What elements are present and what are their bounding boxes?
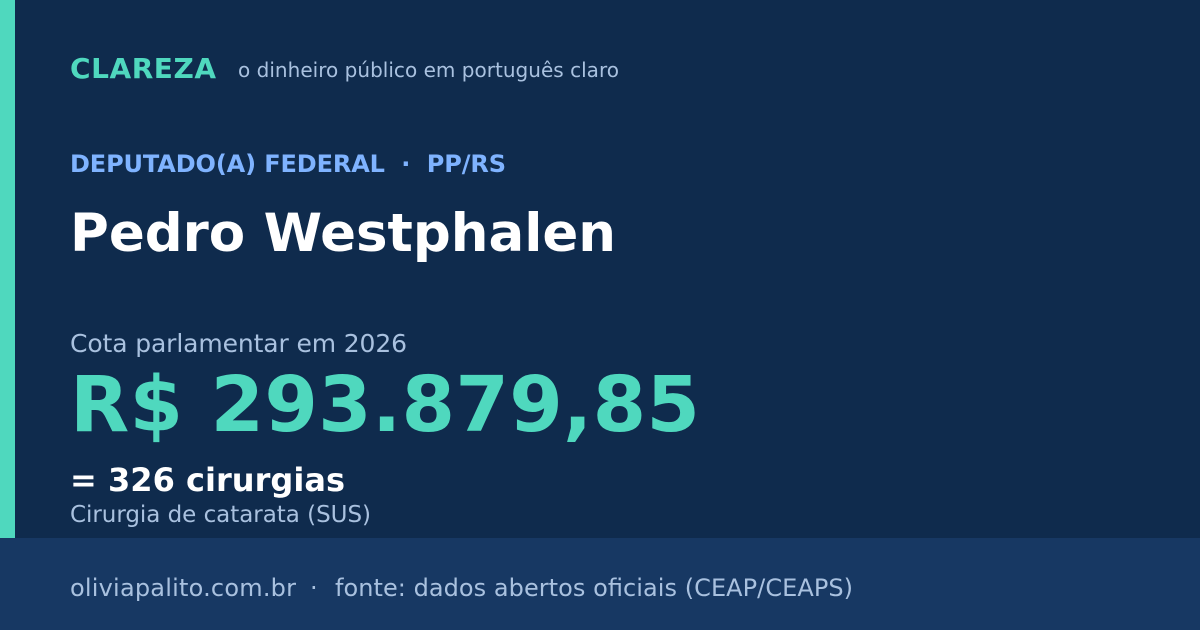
footer text: fonte: dados abertos oficiais (CEAP/CEAPS) — [335, 574, 853, 602]
brand name: CLAREZA — [70, 52, 216, 85]
equivalence description: Cirurgia de catarata (SUS) — [70, 502, 371, 528]
accent bar — [0, 0, 15, 538]
role and party: DEPUTADO(A) FEDERAL · PP/RS — [70, 150, 506, 178]
amount label: Cota parlamentar em 2026 — [70, 329, 407, 358]
tagline: o dinheiro público em português claro — [238, 58, 619, 82]
footer band — [0, 538, 1200, 630]
footer text: oliviapalito.com.br — [70, 574, 296, 602]
politician name: Pedro Westphalen — [70, 203, 616, 264]
footer text — [70, 574, 853, 602]
amount value: R$ 293.879,85 — [70, 361, 700, 450]
footer text: · — [310, 574, 318, 602]
equivalence: = 326 cirurgias — [70, 461, 345, 499]
